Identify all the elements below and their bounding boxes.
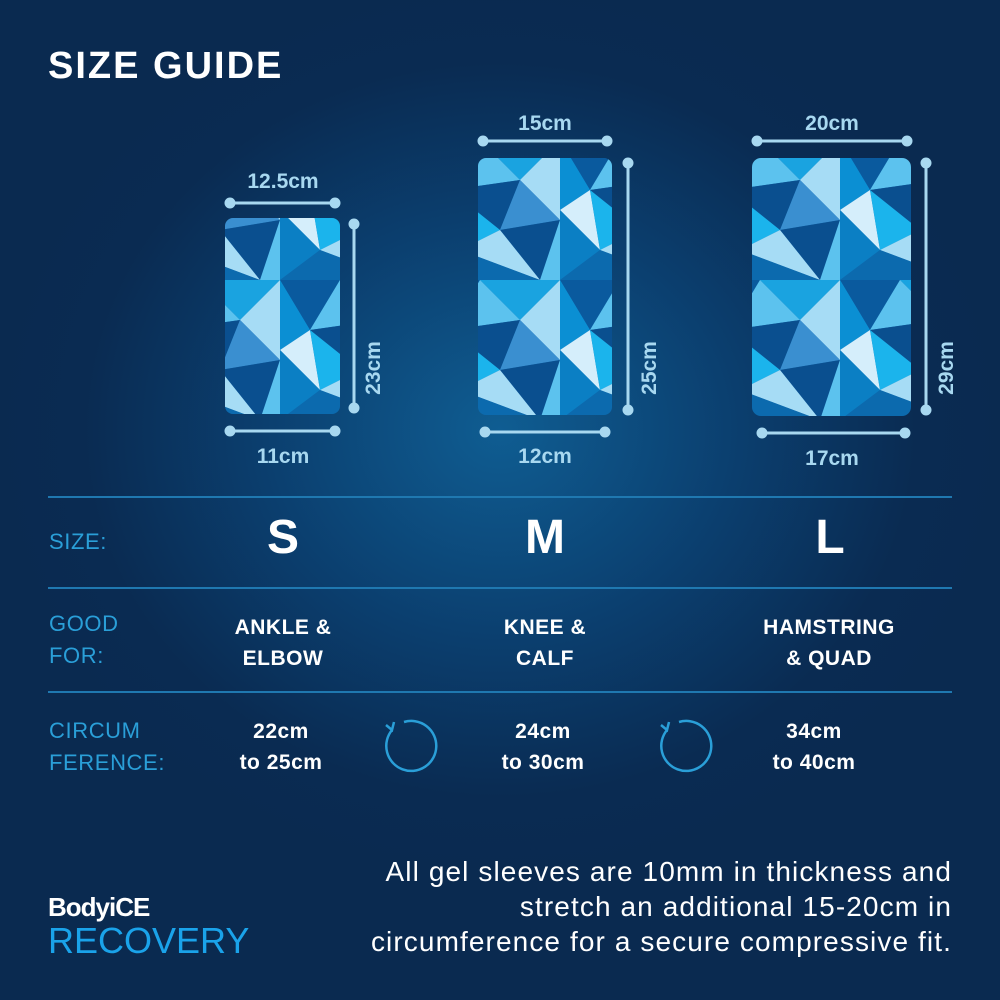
footnote text: All gel sleeves are 10mm in thickness and xyxy=(386,856,952,887)
text: SIZE: xyxy=(49,529,107,554)
logo xyxy=(48,892,249,961)
text: L xyxy=(815,511,845,564)
text: GOOD xyxy=(49,611,119,636)
title: SIZE GUIDE xyxy=(48,45,283,87)
sleeves chart: 15cm xyxy=(518,112,572,135)
text: ELBOW xyxy=(243,647,323,670)
sleeves chart: 23cm xyxy=(362,341,385,395)
text: M xyxy=(525,511,565,564)
sleeves chart xyxy=(224,112,958,470)
good for row xyxy=(49,611,895,670)
text: 24cm xyxy=(515,720,571,743)
footnote text: stretch an additional 15-20cm in xyxy=(520,891,952,922)
circumference row xyxy=(49,718,855,775)
logo: RECOVERY xyxy=(48,920,249,961)
text: & QUAD xyxy=(786,647,872,670)
text: CALF xyxy=(516,647,574,670)
text: FOR: xyxy=(49,643,104,668)
text: to 25cm xyxy=(240,751,322,774)
footnote text: circumference for a secure compressive fit. xyxy=(371,926,952,957)
sleeves chart: 25cm xyxy=(638,341,661,395)
text: ANKLE & xyxy=(235,616,331,639)
text: S xyxy=(267,511,299,564)
sleeves chart: 20cm xyxy=(805,112,859,135)
text: FERENCE: xyxy=(49,750,165,775)
sleeves chart: 12cm xyxy=(518,445,572,468)
text: 22cm xyxy=(253,720,309,743)
sleeves chart: 29cm xyxy=(935,341,958,395)
sleeve L xyxy=(752,136,931,438)
sleeves chart: 17cm xyxy=(805,447,859,470)
sleeve S xyxy=(225,198,359,436)
text: KNEE & xyxy=(504,616,586,639)
text: 34cm xyxy=(786,720,842,743)
text: to 30cm xyxy=(502,751,584,774)
text: to 40cm xyxy=(773,751,855,774)
logo: BodyiCE xyxy=(48,892,149,922)
sleeves chart: 12.5cm xyxy=(247,170,319,193)
text: CIRCUM xyxy=(49,718,141,743)
size row xyxy=(49,511,845,564)
sleeve M xyxy=(478,136,633,437)
footnote text xyxy=(371,856,952,957)
text: HAMSTRING xyxy=(763,616,895,639)
sleeves chart: 11cm xyxy=(257,445,309,468)
